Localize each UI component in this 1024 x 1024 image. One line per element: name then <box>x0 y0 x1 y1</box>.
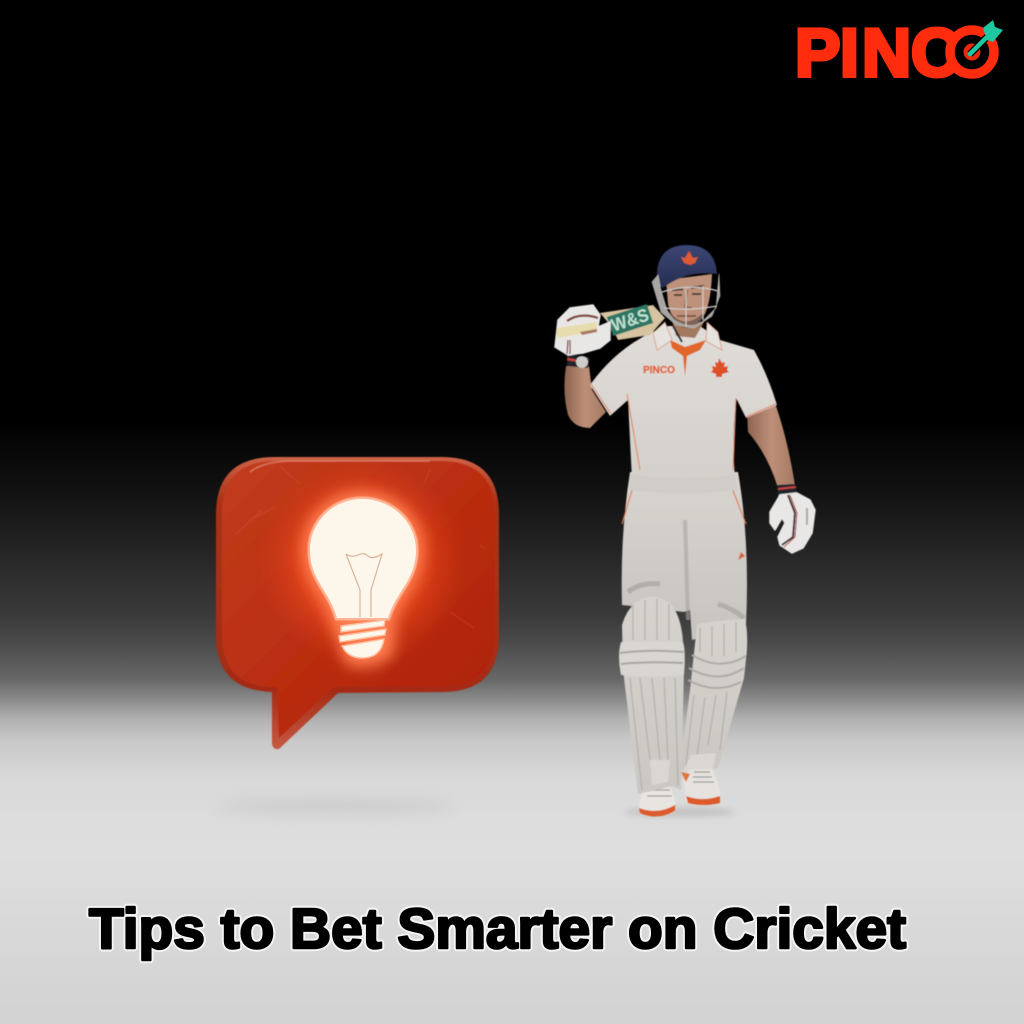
logo: PINCO with target and arrow <box>795 15 1003 91</box>
title: Tips to Bet Smarter on Cricket <box>89 897 906 961</box>
cricket player <box>555 245 815 817</box>
shirt logo text: PINCO <box>643 365 675 376</box>
floor shadow under player <box>625 807 735 817</box>
logo: PINCO with target and arrow: O <box>945 15 998 91</box>
bat: W&S <box>609 305 651 335</box>
right leg pad <box>681 619 747 770</box>
trousers <box>622 472 747 640</box>
left arm <box>564 366 606 428</box>
arrow <box>970 20 1003 54</box>
logo: PINCO with target and arrow: N <box>862 15 911 91</box>
right arm <box>747 403 795 488</box>
floor shadow under speech bubble <box>215 799 455 813</box>
logo: PINCO with target and arrow: I <box>840 15 859 91</box>
target rings <box>950 30 994 74</box>
bubble body <box>216 457 499 749</box>
bat <box>600 304 665 340</box>
title weight overlay: Tips to Bet Smarter on Cricket <box>89 897 906 961</box>
head and face <box>666 274 712 342</box>
right shoe <box>681 768 720 805</box>
right glove <box>770 484 815 553</box>
bulb <box>310 499 416 659</box>
maple leaf chest badge <box>711 358 729 377</box>
shirt <box>590 322 777 494</box>
bulb glow <box>257 457 467 667</box>
left leg pad <box>619 597 685 794</box>
logo: PINCO with target and arrow: P <box>795 15 840 91</box>
icon: speech bubble with light bulb <box>216 457 499 749</box>
batting glove and wrist band <box>555 305 610 368</box>
left shoe <box>639 780 675 817</box>
helmet <box>652 245 720 328</box>
logo: PINCO with target and arrow: C <box>911 15 960 91</box>
C aperture notch <box>936 43 952 61</box>
